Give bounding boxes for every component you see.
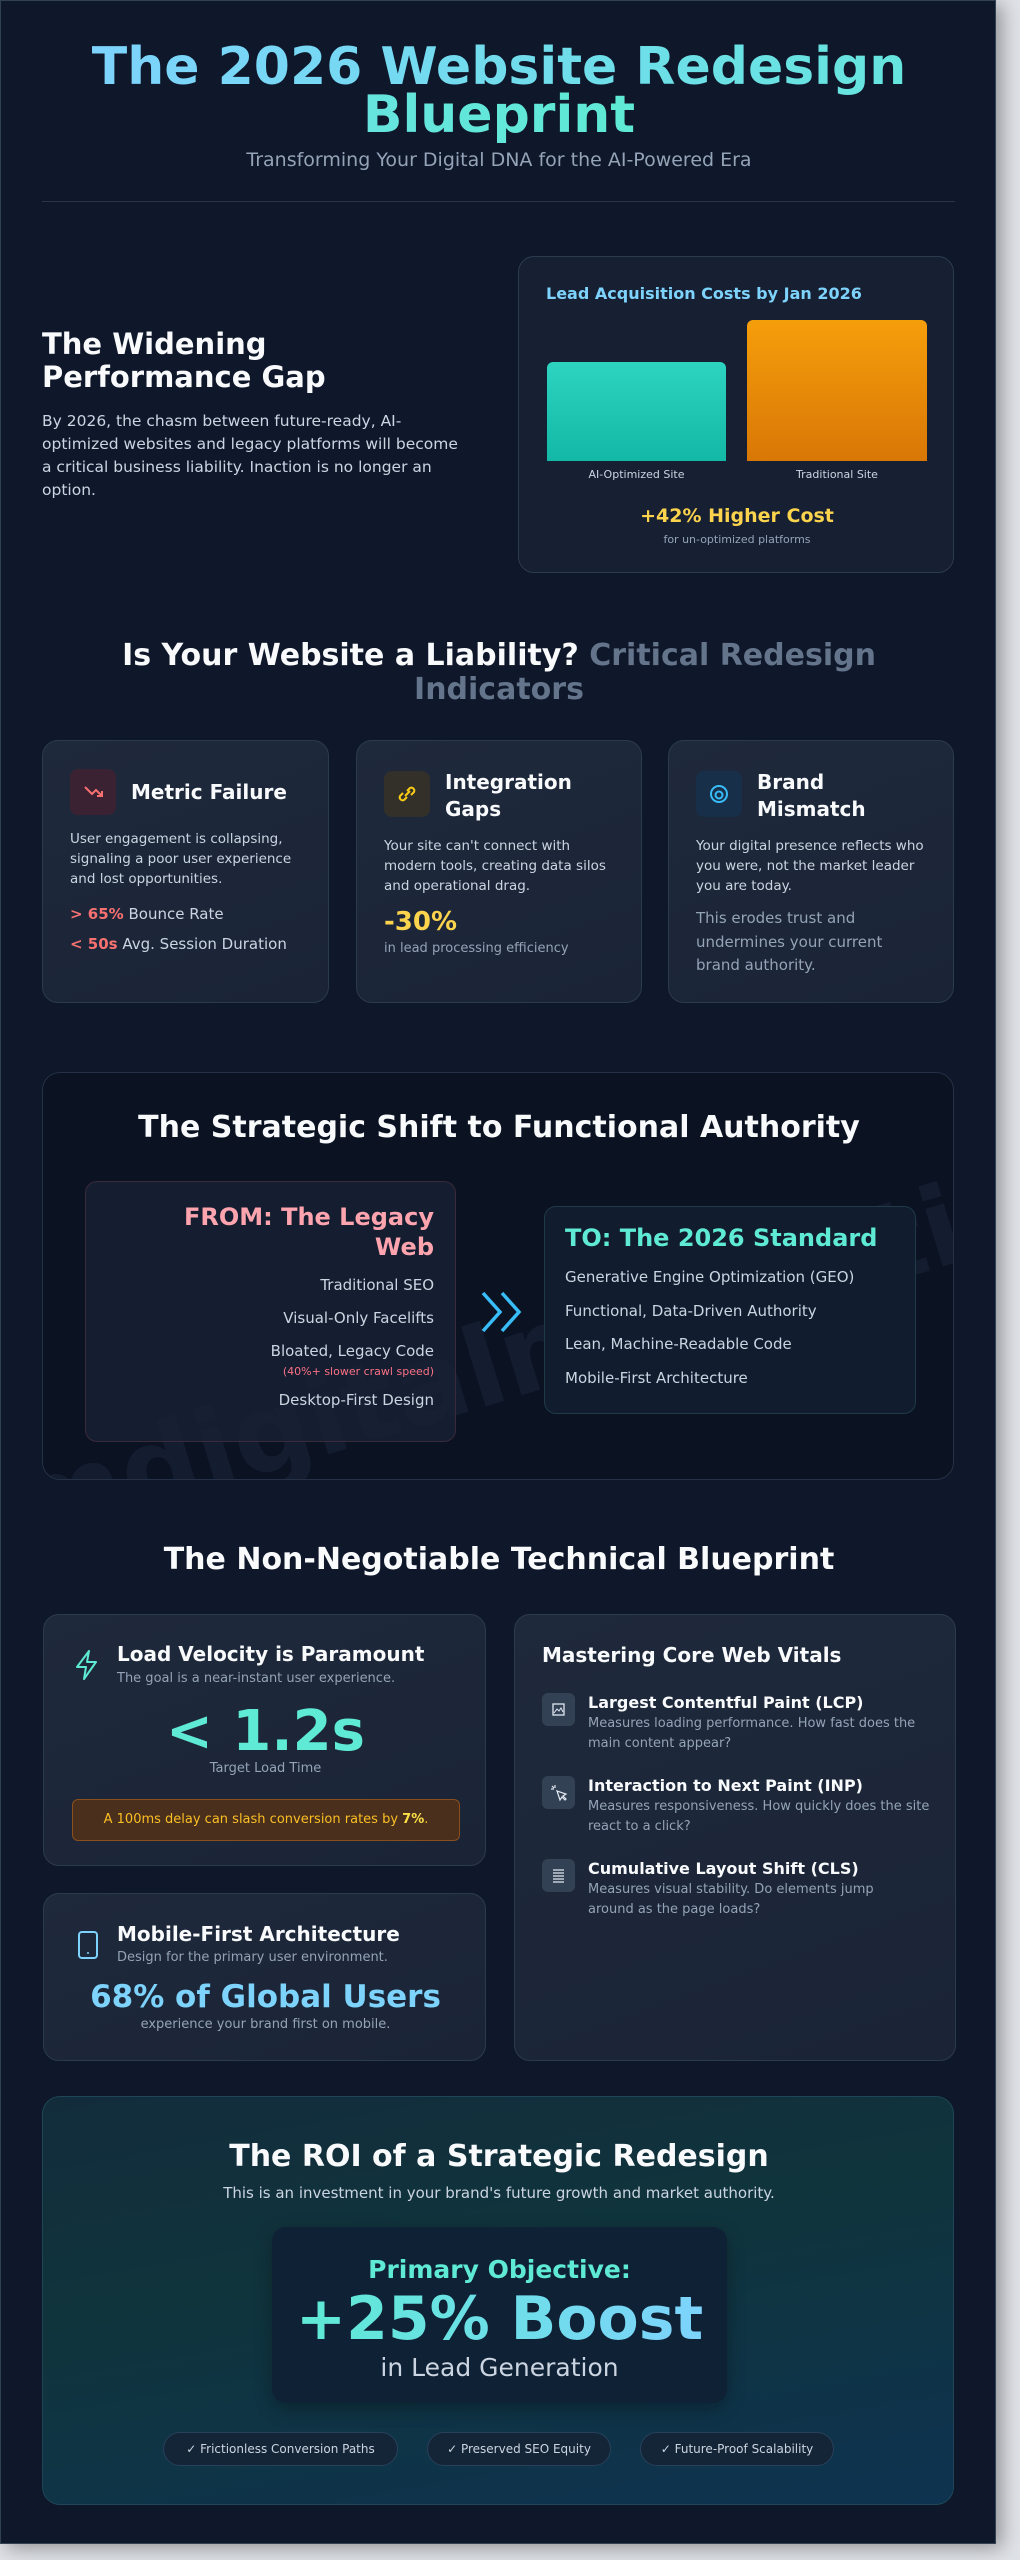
title: The 2026 Website Redesign: [92, 37, 906, 97]
bar: AI-optimized: [547, 362, 726, 461]
item: LCP: Largest Contentful Paint (LCP): [588, 1693, 863, 1712]
chart card: lead acquisition costs: Traditional Site: [796, 468, 878, 481]
pills: benefits: [163, 2432, 834, 2466]
box: from legacy: Web: [375, 1233, 434, 1261]
box: to 2026: TO: The 2026 Standard: [565, 1224, 877, 1252]
title: Blueprint: [363, 85, 635, 145]
icon: phone: [78, 1931, 98, 1959]
box: from legacy: Visual-Only Facelifts: [283, 1309, 434, 1327]
box: primary objective: [272, 2227, 727, 2403]
chart title: Lead Acquisition Costs by Jan 2026: [546, 284, 862, 303]
box: primary objective: Primary Objective:: [368, 2255, 631, 2284]
heading: liability: Indicators: [414, 672, 584, 707]
panel: ROI: [42, 2096, 954, 2505]
card title: Load Velocity is Paramount: [117, 1642, 424, 1666]
panel: load velocity: [43, 1614, 486, 1866]
box: to 2026: Mobile-First Architecture: [565, 1368, 748, 1386]
heading: widening gap: [42, 327, 326, 394]
icon: link: [384, 771, 430, 817]
card title: Mastering Core Web Vitals: [542, 1643, 841, 1667]
card title: Mobile-First Architecture: [117, 1922, 400, 1946]
stats: [70, 905, 287, 953]
heading: technical blueprint: The Non-Negotiable Technical Blueprint: [164, 1542, 834, 1577]
box: from legacy: FROM: The Legacy: [184, 1203, 434, 1231]
card title: Brand: [757, 770, 824, 794]
box: from legacy: Bloated, Legacy Code: [271, 1342, 434, 1360]
box: to 2026: Lean, Machine-Readable Code: [565, 1335, 792, 1353]
panel: integration gaps: [356, 740, 642, 1003]
subtitle: Transforming Your Digital DNA for the AI-Powered Era: [246, 149, 752, 171]
chart card: lead acquisition costs: for un-optimized platforms: [663, 533, 811, 546]
box: to 2026: [544, 1206, 916, 1414]
stats: < 50s Avg. Session Duration: [70, 935, 287, 953]
icon: lightning: [76, 1650, 97, 1680]
description: Your digital presence reflects who you were, not the market leader you are today.: [696, 838, 924, 894]
heading: The Strategic Shift to Functional Authority: [138, 1110, 860, 1145]
title: [92, 37, 906, 145]
panel: mobile-first: Design for the primary user environment.: [117, 1950, 388, 1965]
stat: global users: 68% of Global Users: [90, 1979, 441, 2015]
pills: benefits: ✓ Frictionless Conversion Paths: [186, 2442, 375, 2456]
item: CLS: [542, 1859, 874, 1917]
card title: Integration: [445, 770, 572, 794]
heading: liability: [122, 638, 876, 707]
card title: [445, 770, 572, 821]
box: to 2026: Generative Engine Optimization (GEO): [565, 1268, 854, 1286]
callout: A 100ms delay can slash conversion rates by 7%.: [104, 1812, 428, 1827]
note: This erodes trust and undermines your current brand authority.: [696, 909, 882, 974]
item: CLS: Measures visual stability. Do elements jump around as the page loads?: [588, 1882, 874, 1917]
heading: liability: Is Your Website a Liability? Critical Redesign: [122, 638, 876, 673]
section: performance gap text: [42, 327, 458, 499]
item: INP: Interaction to Next Paint (INP): [588, 1776, 863, 1795]
panel: brand mismatch: [668, 740, 954, 1003]
item: INP: [542, 1776, 929, 1834]
icon: trend down: [70, 769, 116, 815]
card title: [757, 770, 866, 821]
item: LCP: Measures loading performance. How fast does the main content appear?: [588, 1716, 915, 1751]
card title: Mismatch: [757, 797, 866, 821]
pills: benefits: ✓ Preserved SEO Equity: [447, 2442, 591, 2456]
box: to 2026: Functional, Data-Driven Authority: [565, 1302, 817, 1320]
panel: load velocity: Target Load Time: [210, 1761, 321, 1776]
item: INP: Measures responsiveness. How quickly does the site react to a click?: [588, 1799, 929, 1834]
card title: Metric Failure: [131, 780, 287, 804]
paragraph: By 2026, the chasm between future-ready, AI-optimized websites and legacy platforms will become a critical business liability. Inaction is no longer an option.: [42, 412, 458, 499]
item: CLS: Cumulative Layout Shift (CLS): [588, 1859, 859, 1878]
box: from legacy: (40%+ slower crawl speed): [283, 1365, 434, 1378]
panel: strategic shift: [42, 1072, 954, 1480]
panel: load velocity: The goal is a near-instant user experience.: [117, 1671, 395, 1686]
box: primary objective: +25% Boost: [296, 2284, 703, 2354]
box: from legacy: Desktop-First Design: [279, 1391, 434, 1409]
panel: integration gaps: in lead processing efficiency: [384, 941, 569, 956]
icon: fingerprint: [696, 771, 742, 817]
stat callout: +42% Higher Cost: [640, 505, 834, 527]
heading: The ROI of a Strategic Redesign: [229, 2139, 769, 2174]
heading: widening gap: The Widening: [42, 327, 267, 361]
card title: Gaps: [445, 797, 501, 821]
chart card: lead acquisition costs: [518, 256, 954, 573]
box: from legacy: [85, 1181, 456, 1442]
box: primary objective: in Lead Generation: [380, 2353, 619, 2382]
stat: -30%: [384, 907, 457, 937]
description: Your site can't connect with modern tools, creating data silos and operational drag.: [384, 838, 606, 894]
bar labels: AI-Optimized Site: [589, 468, 684, 481]
panel: metric failure: [42, 740, 329, 1003]
stat: load time: < 1.2s: [166, 1699, 365, 1764]
stats: > 65% Bounce Rate: [70, 905, 224, 923]
panel: core web vitals: [514, 1614, 956, 2061]
panel: ROI: This is an investment in your brand's future growth and market authority.: [223, 2184, 775, 2202]
description: User engagement is collapsing, signaling a poor user experience and lost opportunities.: [70, 831, 291, 887]
panel: mobile-first: [43, 1893, 486, 2061]
bar: traditional: [747, 320, 927, 461]
pills: benefits: ✓ Future-Proof Scalability: [661, 2442, 813, 2456]
callout: [72, 1799, 460, 1841]
item: LCP: [542, 1693, 915, 1751]
arrow: double chevron: [482, 1292, 522, 1332]
heading: widening gap: Performance Gap: [42, 360, 326, 394]
box: from legacy: Traditional SEO: [320, 1276, 434, 1294]
panel: mobile-first: experience your brand first on mobile.: [141, 2017, 390, 2032]
